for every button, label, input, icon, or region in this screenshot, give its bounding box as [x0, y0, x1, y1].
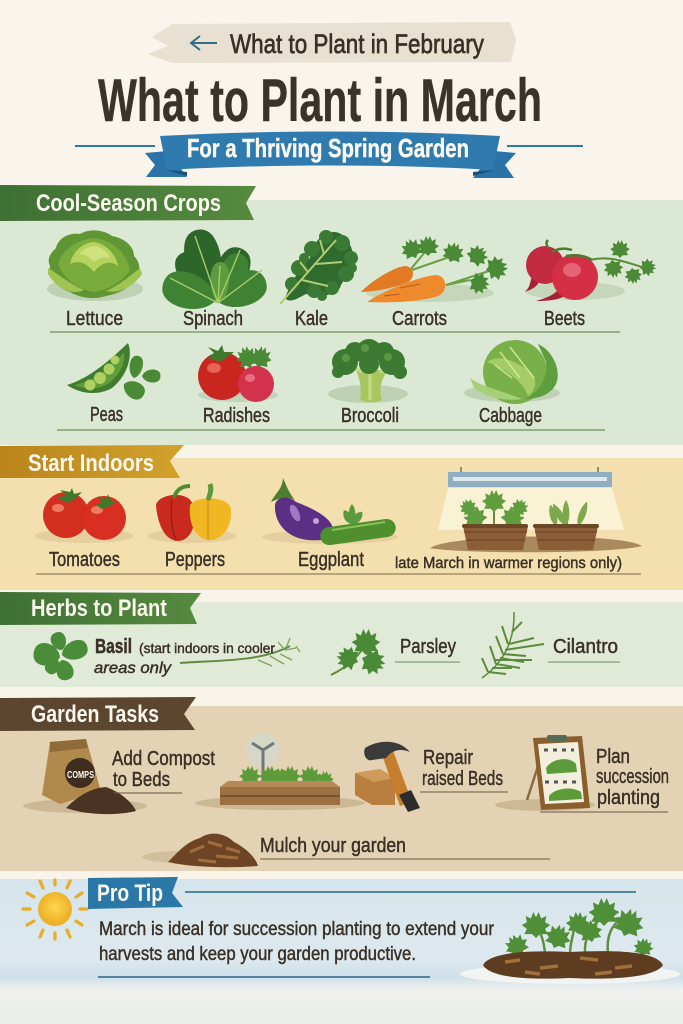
labels row one: Beets: [544, 308, 585, 330]
panel: pro tip: [0, 871, 683, 1024]
icon: eggplant and cucumber: [262, 478, 398, 546]
icon: parsley: [331, 629, 389, 679]
icon: kale: [280, 230, 358, 304]
labels row one: Kale: [295, 308, 328, 330]
icon: raised bed with sprinkler: [195, 733, 365, 810]
banner: Garden Tasks: [0, 697, 196, 731]
icon: compost bag: [23, 739, 147, 814]
labels: start indoors: [49, 549, 622, 572]
back link banner: What to Plant in February: [148, 22, 516, 63]
labels row two: [90, 404, 542, 427]
banner: Start Indoors: Start Indoors: [28, 450, 154, 477]
labels row one: Carrots: [392, 308, 447, 330]
panel: herbs to plant: [0, 590, 683, 687]
text: basil note: areas only: [94, 660, 172, 677]
icon: carrots: [361, 235, 510, 302]
banner: Start Indoors: [0, 445, 184, 478]
label: mulch: Mulch your garden: [260, 835, 406, 857]
labels: start indoors: Eggplant: [298, 549, 364, 571]
labels row one: Spinach: [183, 308, 243, 330]
icon: compost bag: COMPS: [67, 770, 94, 781]
labels row one: Lettuce: [66, 308, 123, 330]
icon: lettuce: [47, 230, 143, 301]
label: add compost: to Beds: [113, 769, 170, 791]
label: plan succession: planting: [597, 787, 660, 809]
icon: clipboard plan: [495, 735, 595, 811]
panel: garden tasks: [0, 687, 683, 871]
label: parsley: Parsley: [400, 636, 456, 658]
icon: spinach: [158, 226, 272, 317]
banner: Pro Tip: Pro Tip: [97, 880, 163, 907]
icon: beets: [524, 240, 657, 301]
icon: broccoli: [328, 339, 408, 403]
label: plan succession: Plan: [596, 746, 630, 768]
icon: hammer and block: [355, 742, 420, 812]
label: repair beds: raised Beds: [422, 768, 503, 790]
labels: start indoors: late March in warmer regions only): [395, 555, 622, 572]
back link banner: What to Plant in February: What to Plant in February: [230, 29, 484, 59]
label: add compost: Add Compost: [112, 748, 215, 770]
label: repair beds: [420, 747, 508, 792]
icon: basil: [32, 630, 90, 682]
icon: dill sprig: [180, 638, 300, 666]
labels row two: Broccoli: [341, 405, 399, 427]
subtitle ribbon: [75, 132, 583, 178]
label: plan succession: [540, 746, 669, 812]
labels row two: Cabbage: [479, 405, 542, 427]
panel: cool-season crops: [0, 185, 683, 445]
banner: Garden Tasks: Garden Tasks: [31, 701, 159, 728]
icon: tomatoes: [34, 488, 134, 543]
labels: start indoors: Peppers: [165, 549, 225, 571]
text: basil note: (start indoors in cooler: [139, 640, 275, 656]
panel: start indoors: [0, 445, 683, 590]
icon: sun: [23, 880, 87, 939]
icon: cilantro: [482, 612, 544, 678]
labels row one: [66, 308, 585, 330]
label: cilantro: Cilantro: [553, 636, 618, 658]
text: tip: harvests and keep your garden productive.: [99, 944, 416, 965]
text: basil note: Basil: [95, 636, 132, 658]
labels row two: Peas: [90, 404, 123, 426]
banner: Cool-Season Crops: [0, 185, 256, 221]
icon: peppers: [147, 484, 237, 543]
icon: mulch pile: [142, 834, 258, 867]
icon: seedlings under grow light: [430, 467, 642, 552]
text: tip: March is ideal for succession planting to extend your: [99, 919, 495, 940]
icon: radishes: [198, 344, 278, 402]
labels row two: Radishes: [203, 405, 270, 427]
labels: start indoors: Tomatoes: [49, 549, 120, 571]
icon: cabbage: [464, 340, 560, 404]
icon: peas: [67, 343, 160, 403]
header: [75, 22, 583, 178]
label: add compost: [112, 748, 215, 793]
text: tip: [99, 919, 495, 965]
banner: Herbs to Plant: Herbs to Plant: [31, 595, 167, 622]
label: repair beds: Repair: [423, 747, 473, 769]
icon: seedlings in soil: [460, 898, 680, 984]
text: basil note: [94, 636, 275, 677]
subtitle ribbon: For a Thriving Spring Garden: [187, 133, 469, 163]
banner: Herbs to Plant: [0, 592, 201, 625]
banner: Cool-Season Crops: Cool-Season Crops: [36, 190, 221, 217]
